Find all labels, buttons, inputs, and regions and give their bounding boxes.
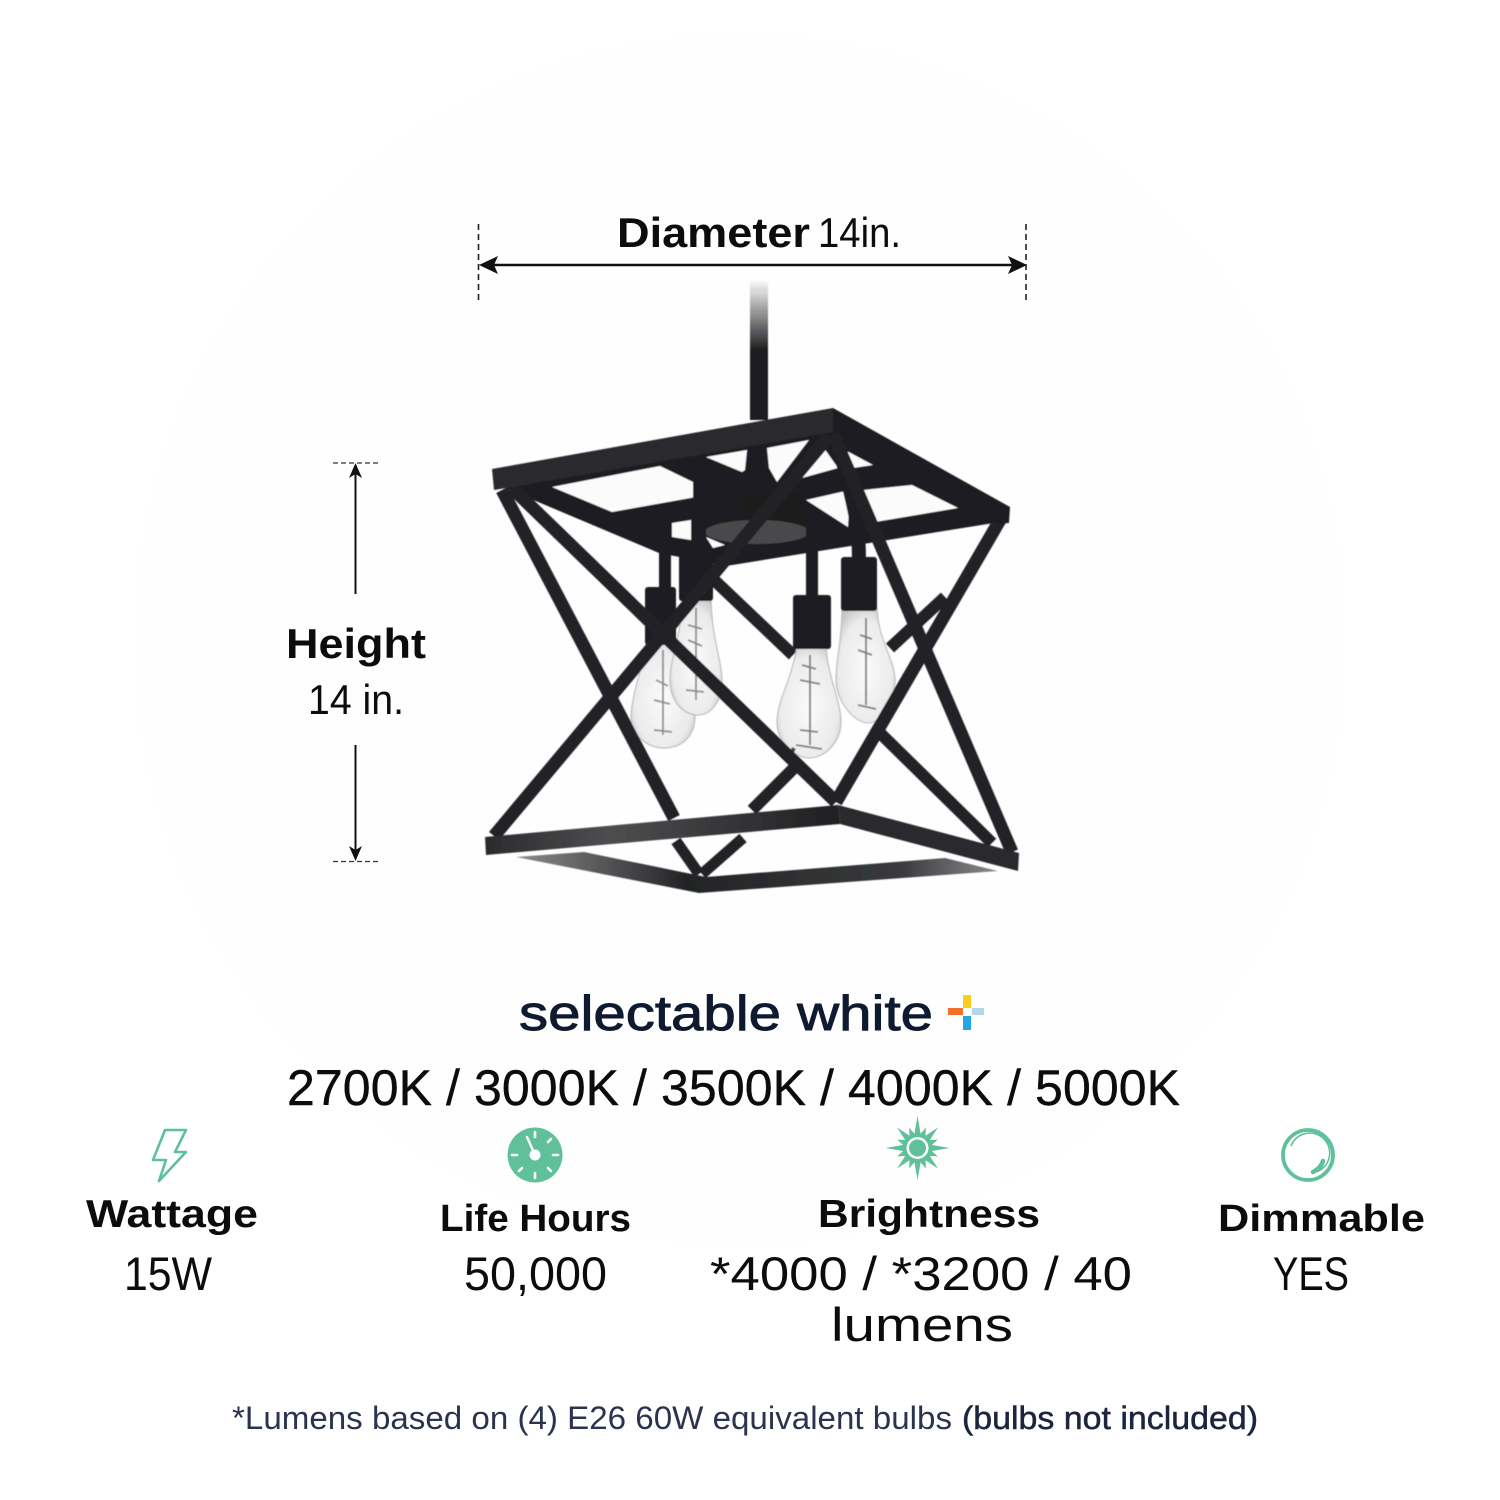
dimmable value: YES [1273, 1247, 1349, 1300]
dimmable label: Dimmable [1218, 1198, 1425, 1240]
footnote: (bulbs not included) [962, 1400, 1258, 1436]
hanging stem [750, 280, 768, 420]
top frame rails [492, 408, 1010, 524]
front diagonals of cage [494, 434, 1012, 852]
background glow [135, 35, 1345, 1245]
diameter label [617, 209, 901, 256]
icon: sun [886, 1116, 950, 1180]
icon: lightning bolt [153, 1130, 186, 1181]
diameter label: Diameter [617, 209, 810, 256]
height label: Height [286, 620, 426, 667]
colour temperature heading [519, 987, 984, 1041]
selectable white label: selectable white [519, 987, 933, 1041]
bulb 3 [777, 528, 841, 760]
spec: brightness [710, 1116, 1132, 1351]
brightness value: lumens [831, 1298, 1013, 1351]
spec: dimmable [1218, 1130, 1425, 1300]
bulb 1 [631, 520, 695, 748]
diameter label: 14in. [818, 209, 901, 256]
life hours value: 50,000 [464, 1247, 607, 1300]
icon: dimmer ring [1283, 1130, 1333, 1180]
height label: 14 in. [308, 676, 404, 723]
bottom frame rail [485, 805, 1019, 871]
height arrow [333, 463, 380, 862]
bottom back rail [516, 852, 998, 893]
canopy [705, 423, 809, 544]
footnote: *Lumens based on (4) E26 60W equivalent bulbs [232, 1400, 952, 1436]
pendant light [485, 280, 1019, 893]
footnote [232, 1400, 1258, 1436]
life hours label: Life Hours [440, 1198, 631, 1240]
inner top frame with glass windows [505, 430, 1000, 566]
dimension: diameter [478, 209, 1027, 304]
wattage label: Wattage [86, 1193, 258, 1236]
brightness value: *4000 / *3200 / 40 [710, 1247, 1132, 1300]
spec: life hours [440, 1128, 631, 1300]
brightness label: Brightness [818, 1193, 1040, 1236]
dimension: height [286, 463, 426, 862]
height label [286, 620, 426, 723]
brightness value [710, 1247, 1132, 1351]
back diagonals of cage [676, 578, 992, 874]
wattage value: 15W [124, 1247, 213, 1300]
diameter arrow [478, 224, 1027, 304]
icon: clock [508, 1128, 562, 1182]
spec: wattage [86, 1130, 258, 1300]
icon: colour plus [948, 995, 984, 1030]
bulb 4 [836, 440, 895, 723]
colour temperature options: 2700K / 3000K / 3500K / 4000K / 5000K [287, 1060, 1180, 1116]
bulb 2 [670, 477, 722, 715]
